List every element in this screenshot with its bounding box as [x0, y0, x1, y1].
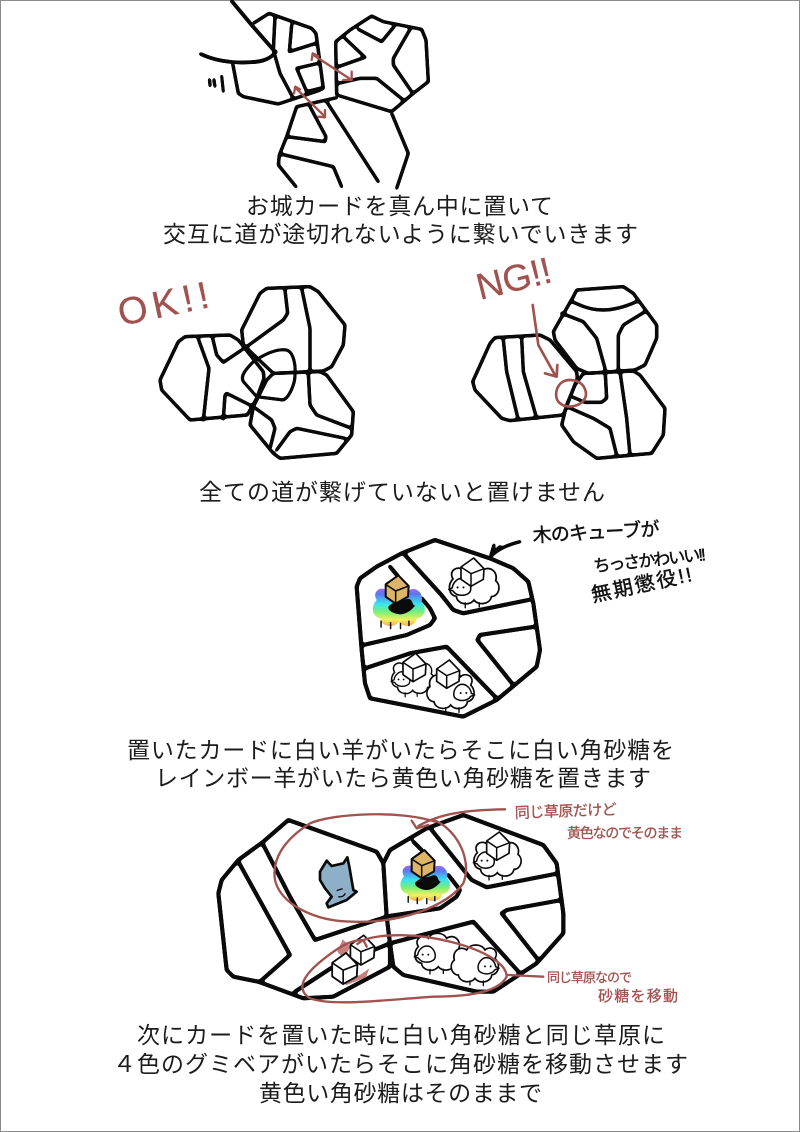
- white sheep with white cube, upper right: [449, 558, 499, 608]
- blue gummy bear meeple: [320, 857, 357, 907]
- caption: placing the castle card: [163, 193, 638, 247]
- caption: placing sugar cubes: 置いたカードに白い羊がいたらそこに白い角砂糖を: [127, 737, 674, 763]
- red oval around upper pasture: [274, 809, 505, 922]
- hand-written note: wooden cubes: ちっさかわいい!!: [592, 545, 707, 576]
- red note: yellow stays: [515, 801, 683, 841]
- left card: [218, 820, 390, 998]
- caption: moving cubes to gummy bear: 次にカードを置いた時に白い角砂糖と同じ草原に: [137, 1022, 665, 1048]
- red arrow and circle marking the broken road: [533, 305, 586, 407]
- white sheep with white cube, lower right: [427, 660, 475, 712]
- pink house with two white cubes: [332, 935, 375, 985]
- right card: [383, 815, 563, 992]
- red oval around lower pasture: [302, 935, 543, 1002]
- caption: placing sugar cubes: レインボー羊がいたら黄色い角砂糖を置きます: [155, 765, 651, 791]
- red note: yellow stays: 黄色なのでそのまま: [567, 825, 683, 841]
- caption: placing the castle card: 交互に道が途切れないように繋いでいきます: [163, 221, 638, 247]
- NG hand-written label: NG!!: [472, 250, 556, 308]
- two white sheep without cubes: [414, 933, 499, 986]
- red note: yellow stays: 同じ草原だけど: [515, 801, 617, 822]
- red note: sugar moves: 同じ草原なので: [547, 970, 632, 985]
- hand-written note: wooden cubes: [532, 517, 707, 607]
- left card held by hand: [233, 13, 323, 104]
- card outline and roads: [357, 540, 540, 717]
- illustration: hand placing castle card with two neighbouring cards: [201, 1, 428, 188]
- illustration: valid placement of three cards: [160, 287, 353, 458]
- caption: placing sugar cubes: [127, 737, 674, 791]
- caption: moving cubes to gummy bear: ４色のグミベアがいたらそこに角砂糖を移動させます: [113, 1051, 688, 1077]
- hand-written note: wooden cubes: 無期懲役!!: [589, 563, 694, 607]
- rainbow sheep with yellow cube: [400, 850, 450, 904]
- motion marks: [209, 76, 223, 92]
- caption: moving cubes to gummy bear: 黄色い角砂糖はそのままで: [259, 1080, 542, 1106]
- caption: moving cubes to gummy bear: [113, 1022, 688, 1106]
- illustration: two cards with meeple and moved cubes: [218, 809, 563, 1002]
- white sheep with white cube, lower left: [391, 653, 434, 697]
- illustration: single card with sheep and cubes: [357, 540, 540, 717]
- bottom card partly cropped: [278, 98, 408, 188]
- rainbow sheep with yellow cube: [373, 575, 425, 629]
- hand and arm outline: [201, 1, 276, 63]
- illustration: invalid placement of three cards: [473, 287, 665, 458]
- red connection arrows: [294, 53, 352, 117]
- red note: sugar moves: 砂糖を移動: [598, 988, 678, 1005]
- arrow pointing to cube: [491, 542, 520, 557]
- OK hand-written label: OK!!: [114, 275, 213, 335]
- caption: all roads must connect: 全ての道が繋げていないと置けません: [199, 479, 605, 505]
- red note: sugar moves: [547, 970, 678, 1005]
- caption: placing the castle card: お城カードを真ん中に置いて: [246, 193, 553, 219]
- hand-written note: wooden cubes: 木のキューブが: [532, 517, 660, 547]
- white sheep with white cube: [473, 832, 521, 880]
- right card: [336, 16, 428, 112]
